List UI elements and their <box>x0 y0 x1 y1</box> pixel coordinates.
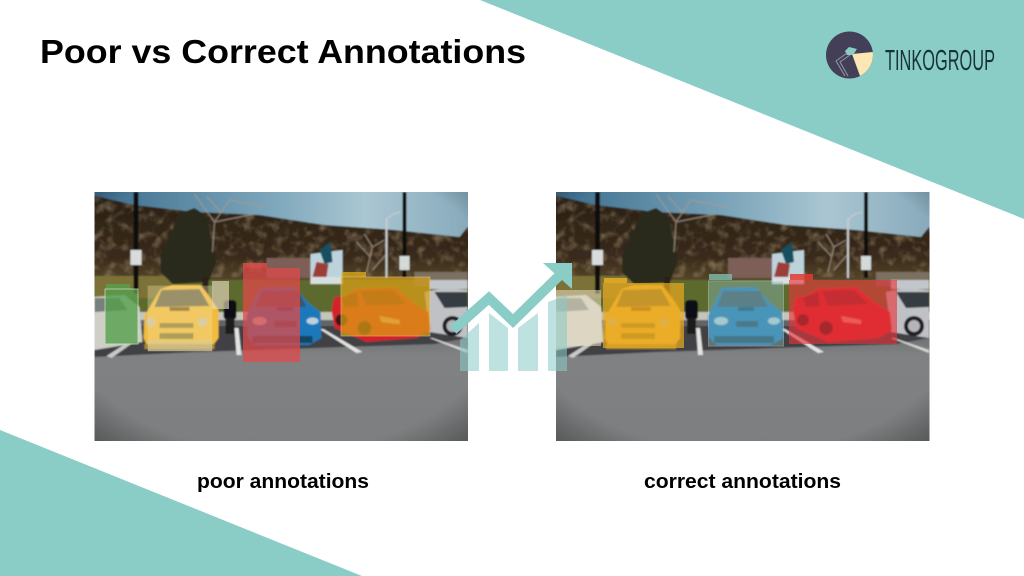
annotation: red box <box>789 274 897 344</box>
annotation: yellow box <box>603 278 684 348</box>
caption: poor annotations: poor annotations <box>197 471 369 493</box>
caption: correct annotations: correct annotations <box>644 471 841 493</box>
icon: growth chart with arrow <box>453 263 572 371</box>
annotation: green box <box>105 284 138 344</box>
logo: Tinkogroup <box>826 32 995 78</box>
annotation: red box <box>243 263 300 362</box>
icon: lamp logo <box>826 32 873 78</box>
annotation: orange box <box>341 272 430 336</box>
annotation: blue box <box>708 274 784 346</box>
background triangle: bottom left <box>0 430 362 576</box>
chart arrow <box>453 263 572 330</box>
annotation: pale box on left car <box>556 290 601 346</box>
panel: poor annotations photo <box>92 189 472 445</box>
panel: correct annotations photo <box>553 189 933 445</box>
title: Poor vs Correct Annotations <box>40 34 526 71</box>
chart bars <box>460 295 567 371</box>
background triangle: top right <box>480 0 1024 219</box>
annotation: pale yellow box <box>148 281 229 351</box>
